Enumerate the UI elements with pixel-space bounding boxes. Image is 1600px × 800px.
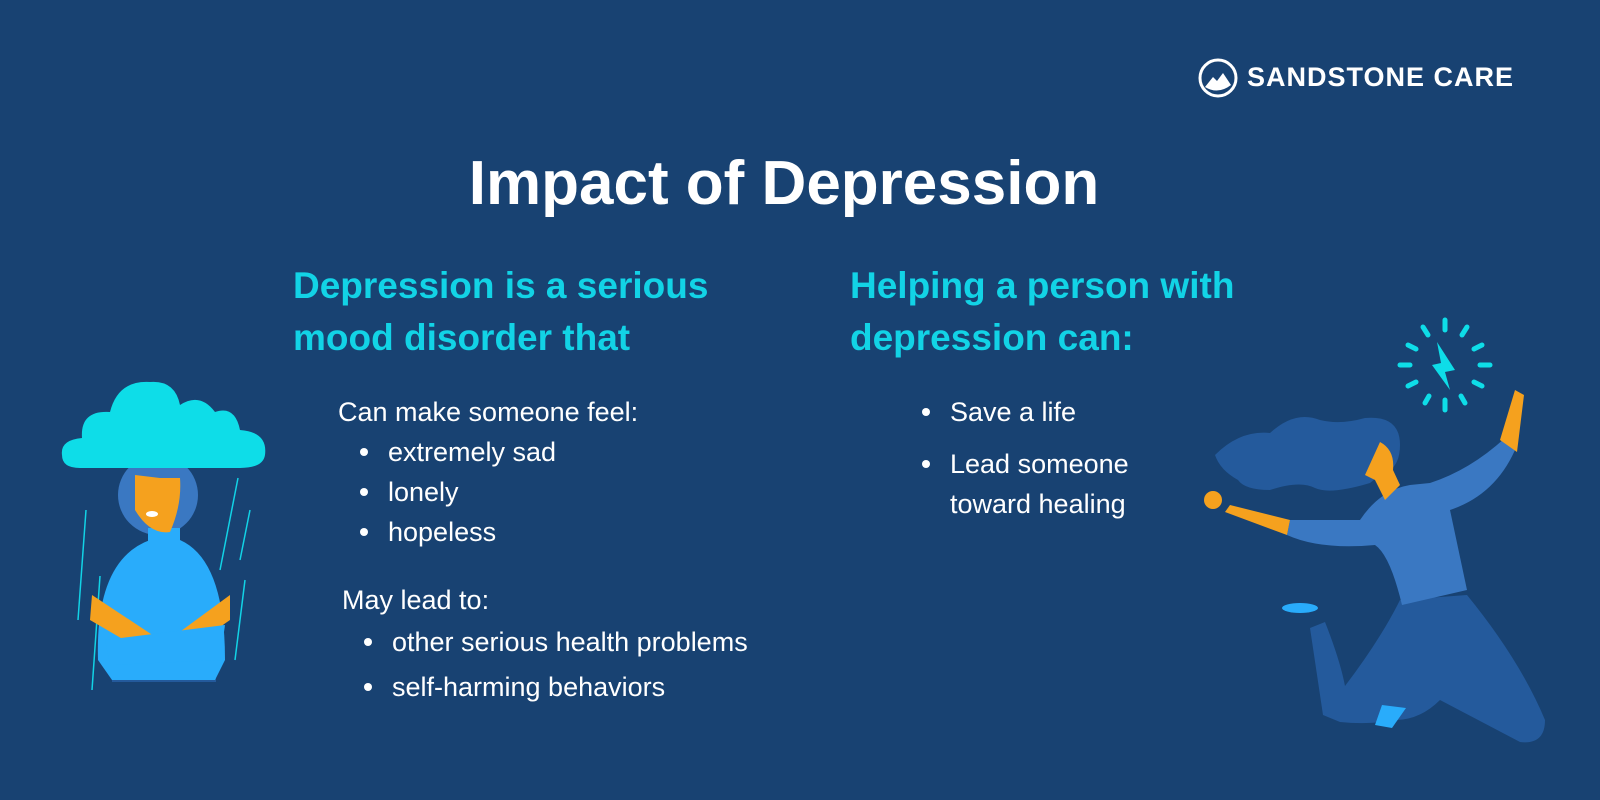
- heading: left: Depression is a serious: [293, 265, 708, 306]
- text block: feel: [338, 397, 638, 547]
- heading: left: [293, 265, 708, 358]
- text block: may lead to: other serious health problems: [392, 627, 748, 657]
- text block: helping: Save a life: [950, 397, 1076, 427]
- text block: helping: toward healing: [950, 489, 1126, 519]
- text block: may lead to: May lead to:: [342, 585, 489, 615]
- text block: feel: lonely: [388, 477, 459, 507]
- text block: may lead to: self-harming behaviors: [392, 672, 665, 702]
- heading: right: Helping a person with: [850, 265, 1234, 306]
- text block: may lead to: [342, 585, 748, 702]
- text block: feel: hopeless: [388, 517, 496, 547]
- text block: feel: Can make someone feel:: [338, 397, 638, 427]
- heading: left: mood disorder that: [293, 317, 630, 358]
- text block: helping: [922, 397, 1129, 519]
- logo: SANDSTONE CARE: [1247, 62, 1514, 92]
- logo: [1198, 58, 1514, 98]
- heading: right: depression can:: [850, 317, 1134, 358]
- title: Impact of Depression: [469, 149, 1099, 218]
- text block: helping: Lead someone: [950, 449, 1129, 479]
- heading: right: [850, 265, 1234, 358]
- text block: feel: extremely sad: [388, 437, 556, 467]
